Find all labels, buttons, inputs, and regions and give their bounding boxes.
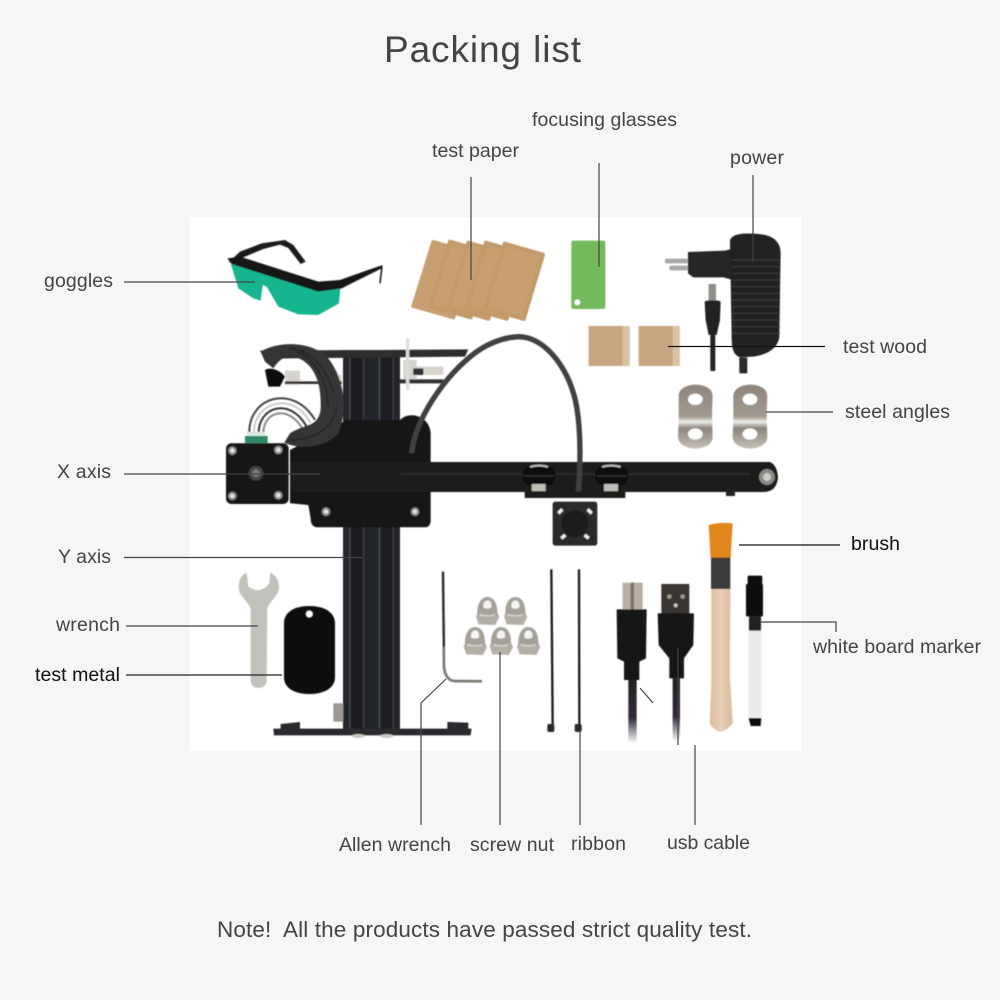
icon: focusing glasses green plate bbox=[571, 241, 605, 309]
callout: brush: brush bbox=[851, 533, 900, 555]
icon: allen wrench bbox=[443, 572, 482, 681]
callout: Allen wrench bbox=[339, 679, 451, 856]
icon: ribbon cable ties bbox=[547, 569, 582, 732]
icon: test paper cards bbox=[413, 242, 543, 319]
icon: laser engraver machine bbox=[226, 337, 778, 738]
callout: screw nut: screw nut bbox=[470, 834, 555, 856]
icon: usb cable connectors bbox=[617, 583, 694, 743]
title: Packing list bbox=[384, 29, 582, 70]
callout: wrench: wrench bbox=[55, 614, 120, 636]
callout: X axis: X axis bbox=[57, 461, 111, 483]
product photo group bbox=[226, 234, 781, 743]
callout: ribbon: ribbon bbox=[571, 833, 626, 855]
velcro strap bbox=[261, 344, 344, 447]
callout: usb cable: usb cable bbox=[667, 832, 750, 854]
icon: brush bbox=[709, 523, 733, 732]
carriage wheels bbox=[523, 466, 555, 485]
icon: power adapter bbox=[665, 234, 781, 373]
callout: usb cable bbox=[640, 648, 750, 854]
vertical extrusion bbox=[343, 350, 400, 732]
callout: test wood: test wood bbox=[843, 336, 927, 358]
callout: white board marker: white board marker bbox=[812, 636, 982, 658]
back plate bbox=[290, 415, 431, 527]
callout: Allen wrench: Allen wrench bbox=[339, 834, 451, 856]
icon: steel angles bbox=[678, 385, 767, 449]
curved cable bbox=[412, 337, 580, 492]
callout: focusing glasses: focusing glasses bbox=[532, 109, 677, 131]
callout: test paper: test paper bbox=[432, 140, 520, 162]
callout: goggles: goggles bbox=[44, 270, 113, 292]
callout: steel angles: steel angles bbox=[845, 401, 950, 423]
callout: power bbox=[730, 147, 784, 262]
callout: test paper bbox=[432, 140, 520, 280]
callout: white board marker bbox=[760, 622, 982, 658]
note: Note! All the products have passed strict quality test. bbox=[217, 917, 752, 942]
callout: test metal: test metal bbox=[35, 664, 120, 686]
icon: wrench bbox=[239, 573, 279, 688]
callout: ribbon bbox=[571, 730, 626, 855]
base foot bbox=[273, 722, 472, 735]
callout: Y axis: Y axis bbox=[58, 546, 111, 568]
white product panel bbox=[190, 217, 801, 751]
icon: goggles bbox=[227, 240, 383, 315]
icon: white board marker bbox=[746, 576, 763, 726]
icon: test wood blocks bbox=[589, 326, 680, 366]
icon: screw nuts bbox=[464, 597, 540, 655]
callout: power: power bbox=[730, 147, 784, 169]
icon: test metal tag bbox=[284, 606, 335, 694]
stepper motor bbox=[226, 443, 289, 504]
x axis rail bbox=[290, 462, 778, 492]
wires bbox=[249, 398, 315, 433]
laser fan module bbox=[553, 502, 597, 546]
top cross bar bbox=[260, 349, 468, 359]
